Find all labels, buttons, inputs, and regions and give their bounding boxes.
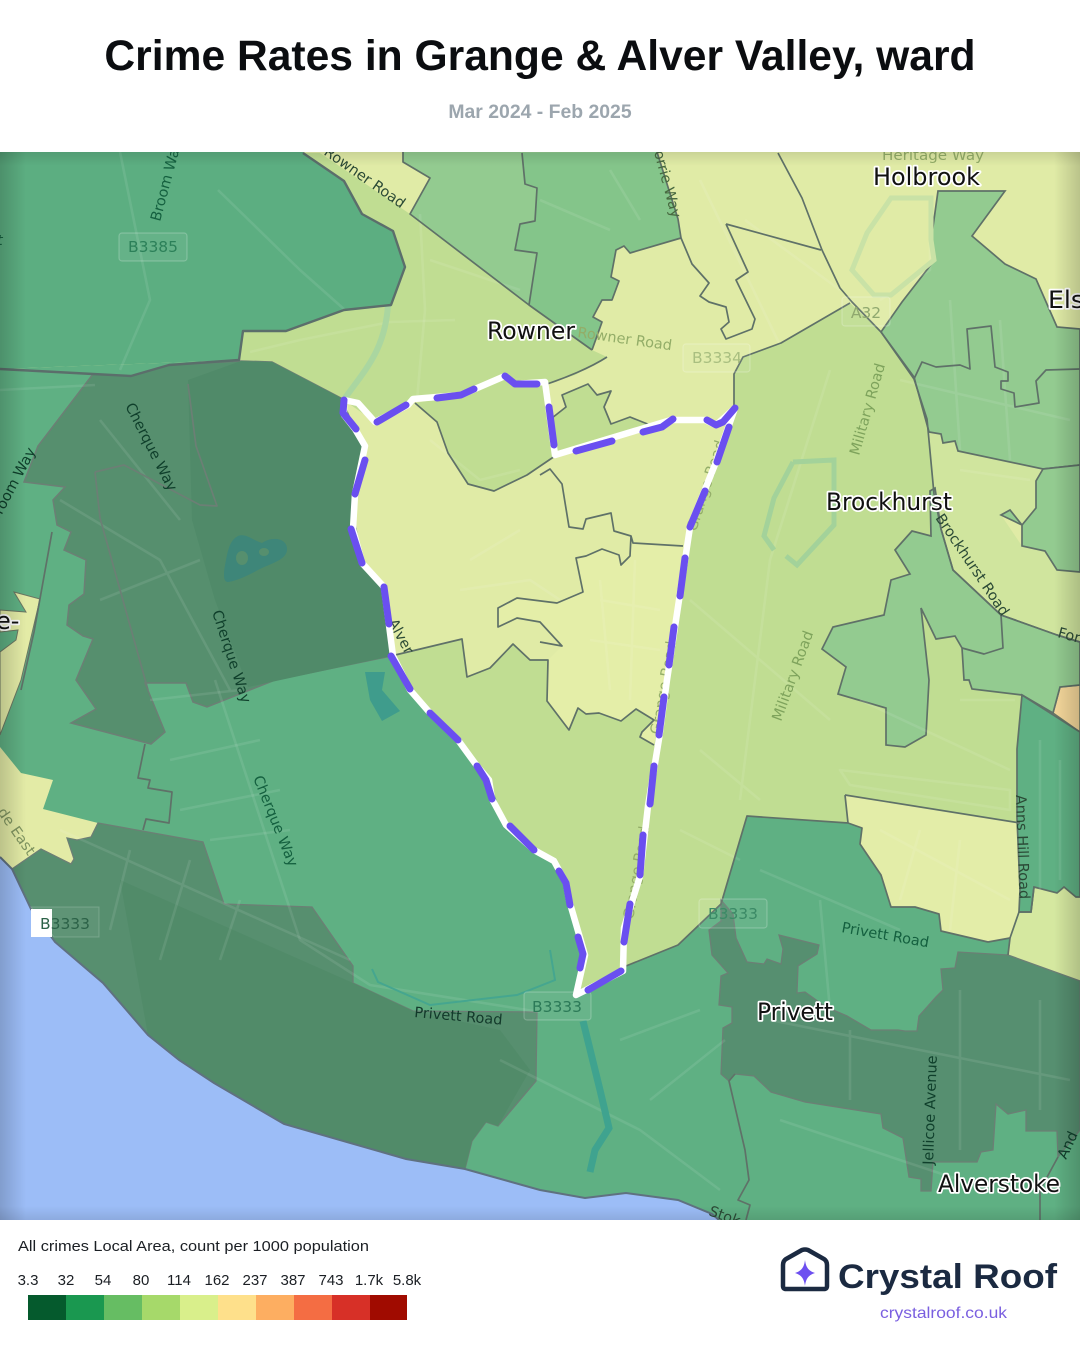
region: pale block south east [845, 795, 1020, 942]
road label: Privett Road east: Privett Road [840, 920, 930, 951]
region: pale-green east edge [1008, 887, 1080, 981]
legend scale values: 114 [167, 1272, 191, 1289]
place label: Alverstoke: Alverstoke [938, 1170, 1060, 1198]
title: Crime Rates in Grange & Alver Valley, ward [104, 32, 976, 80]
wordmark: Crystal Roof [838, 1258, 1058, 1296]
road badge: B3334 [683, 344, 750, 372]
logo: Crystal Roof [783, 1250, 1058, 1322]
region: sea [0, 857, 719, 1240]
region: inner ward north-east area [554, 385, 646, 450]
place label: Rowner: Rowner [487, 317, 575, 345]
road label: Brockhurst Road: Brockhurst Road [932, 511, 1012, 619]
region: dark forest area [238, 361, 388, 684]
legend scale values: 3.3 [18, 1272, 38, 1289]
region: centre ward paler area [654, 736, 656, 744]
legend scale values [18, 1272, 422, 1289]
legend scale values: 162 [204, 1272, 230, 1289]
road label: Privett Road west: Privett Road [414, 1005, 503, 1029]
legend title: All crimes Local Area, count per 1000 population [18, 1238, 369, 1255]
region: southern dark coast area [12, 823, 537, 1169]
road badge: B3333 west: B3333 [40, 915, 90, 933]
region: east teal-green [1017, 695, 1080, 912]
road label: Cherque Way north: Cherque Way [121, 401, 180, 494]
ward boundary: white line with purple dashes [343, 376, 735, 995]
region: broad east area [396, 303, 1021, 989]
road badge: B3333 west [31, 907, 99, 937]
region: north mid green darker east block [515, 152, 681, 350]
road badge: B3385: B3385 [128, 238, 178, 256]
place label: Privett: Privett [757, 998, 833, 1026]
region: south-west coast pale strip [0, 747, 98, 869]
region: Rowner light green [239, 153, 607, 422]
place label: Brockhurst: Brockhurst [826, 488, 952, 516]
icon: house with sparkle [783, 1250, 827, 1289]
region: darker shoreline parkland [352, 982, 500, 1168]
legend scale values: 743 [318, 1272, 344, 1289]
road label: Grange Road north: Grange Road [685, 439, 729, 533]
legend scale values: 54 [95, 1272, 111, 1289]
legend scale values: 387 [280, 1272, 306, 1289]
road badge: A32: A32 [851, 304, 881, 322]
region: north-east green [881, 191, 1080, 469]
region: west and south-west mid green [0, 360, 1080, 1220]
region: west coast pale strip [0, 592, 40, 735]
water: Alver lake [365, 672, 400, 721]
road label: Orrie Way: orrie Way [650, 149, 684, 220]
road badge: B3333 centre-east: B3333 [708, 905, 758, 923]
road badge: B3333 centre: B3333 [532, 998, 582, 1016]
road badge: B3333 centre [524, 992, 591, 1020]
region: west dark area [24, 361, 391, 744]
legend scale values: 1.7k [355, 1272, 384, 1289]
road label: Cherque Way middle: Cherque Way [208, 608, 253, 706]
road label: Grange Road middle: Grange Road [648, 640, 680, 736]
road label: Rowner Road west: Rowner Road [321, 144, 408, 212]
road badge: B3334: B3334 [692, 349, 742, 367]
region: pale block right of Brockhurst [929, 432, 1080, 642]
legend colour bar [28, 1295, 407, 1320]
road label: Military Road south: Military Road [770, 629, 817, 723]
road badge: A32 [842, 297, 890, 326]
website url: crystalroof.co.uk [880, 1305, 1008, 1322]
water: forest lake [224, 535, 287, 582]
place label: Holbrook: Holbrook [873, 163, 980, 191]
legend scale values: 5.8k [393, 1272, 422, 1289]
road label: Heritage Way: Heritage Way [882, 148, 984, 164]
road label: Rowner Road east: Rowner Road [576, 325, 673, 354]
road label: Jellicoe Avenue: Jellicoe Avenue [921, 1055, 941, 1166]
water: Rowner stream [345, 305, 388, 398]
road label: Grange Road south: Grange Road [621, 825, 653, 921]
water: fort moat, Holbrook [852, 198, 934, 295]
legend scale values: 237 [242, 1272, 268, 1289]
base area: pale yellow-green [14, 152, 1080, 802]
water: fort moat, Brockhurst [764, 460, 834, 565]
coastline [0, 857, 719, 1220]
boundary lines [0, 152, 1080, 1220]
map edge vignette [0, 152, 1080, 1220]
road label: Anns Hill Road: Anns Hill Road [1012, 795, 1032, 900]
water: Privett stream [372, 950, 555, 1005]
region: inner ward north-west area [415, 376, 555, 491]
legend scale values: 32 [58, 1272, 74, 1289]
street network [0, 152, 1070, 1190]
road label: Alver road fragment: Alver [384, 616, 416, 657]
region: Brockhurst Road green [822, 488, 1080, 747]
region: north mid green [404, 152, 646, 304]
region: peach high-rate area [1053, 685, 1080, 732]
road label: Broom Way north: Broom Way [148, 138, 185, 223]
region: east green [1001, 465, 1080, 572]
water: river channel [583, 1021, 609, 1172]
road label fragment: Stoke: Stok [707, 1204, 743, 1230]
road badge: B3333 centre-east [699, 899, 767, 928]
region: north-west green [0, 152, 405, 369]
subtitle: date range: Mar 2024 - Feb 2025 [448, 101, 632, 123]
legend [18, 1238, 422, 1320]
legend scale values: 80 [133, 1272, 149, 1289]
road label: Cherque Way south: Cherque Way [249, 774, 301, 870]
region: Privett dark area [709, 900, 1080, 1191]
road label: Military Road north: Military Road [847, 362, 889, 457]
road badge: B3385 [119, 233, 187, 261]
